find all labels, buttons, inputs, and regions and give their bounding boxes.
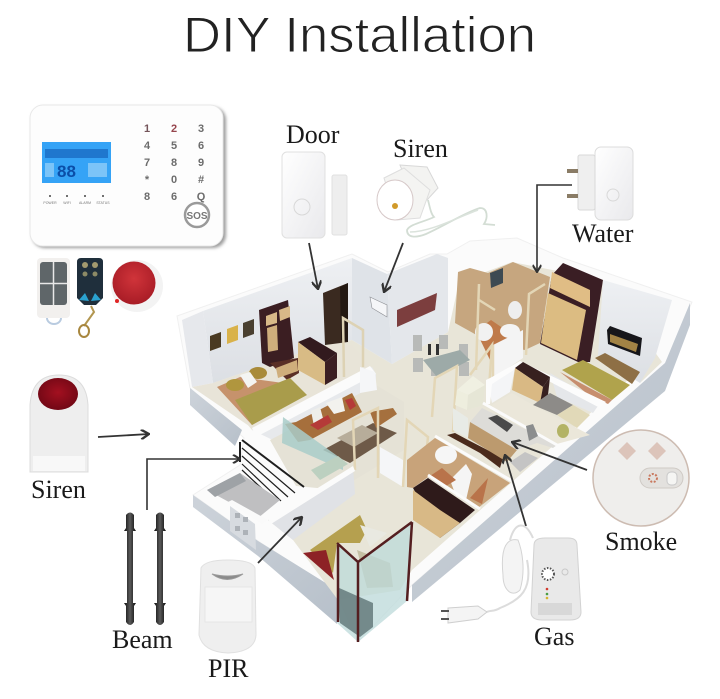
stair railing xyxy=(240,440,304,501)
icon: alarm keypad panel: 1 xyxy=(144,123,150,135)
bed left bedroom xyxy=(217,367,307,425)
device: PIR sensor xyxy=(199,560,256,653)
wardrobe left bedroom xyxy=(259,300,299,380)
icon: alarm keypad panel: 5 xyxy=(171,140,177,152)
label: Water: Water xyxy=(572,219,634,248)
label: Beam: Beam xyxy=(112,625,173,654)
arrow: water sensor xyxy=(537,185,572,272)
icon: alarm keypad panel: 3 xyxy=(198,123,204,135)
outer wall faces xyxy=(190,303,690,624)
dining set xyxy=(413,335,470,432)
label: Gas: Gas xyxy=(534,622,574,651)
wall separating bedroom and living room xyxy=(252,367,376,442)
device: beam detectors xyxy=(124,512,166,625)
icon: alarm keypad panel: # xyxy=(198,174,204,186)
device: gas detector and plug xyxy=(441,525,581,623)
cabinet lower xyxy=(413,478,475,538)
icon: alarm keypad panel: 7 xyxy=(144,157,150,169)
floor xyxy=(213,262,662,600)
device: door sensor xyxy=(282,152,347,238)
balcony xyxy=(207,473,280,550)
label: top Siren: Siren xyxy=(393,134,448,163)
arrow: smoke xyxy=(512,442,587,470)
left bedroom walls xyxy=(182,254,448,428)
icon: white remote xyxy=(37,258,70,324)
device: outdoor siren xyxy=(30,375,88,472)
icon: alarm keypad panel: 9 xyxy=(198,157,204,169)
cabinet left bedroom xyxy=(298,337,337,385)
lower bedroom wall xyxy=(268,466,355,540)
fridge xyxy=(453,376,485,438)
arrow: PIR xyxy=(258,517,302,563)
label: PIR: PIR xyxy=(208,654,249,683)
icon: alarm keypad panel: 8 xyxy=(144,191,150,203)
icon: alarm keypad panel: 2 xyxy=(171,123,177,135)
electric switch panel xyxy=(235,513,248,535)
second room: cabinet and single bed xyxy=(486,361,606,445)
door xyxy=(323,283,363,377)
icon: alarm keypad panel: 6 xyxy=(198,140,204,152)
wall pictures xyxy=(210,319,254,351)
title: DIY Installation xyxy=(183,7,536,63)
icon: alarm keypad panel: 8 xyxy=(171,157,177,169)
right bedroom wall and tv xyxy=(595,280,672,384)
icon: alarm keypad panel: WIFI xyxy=(63,201,71,205)
icon: alarm keypad panel: * xyxy=(145,174,150,186)
control panel with remotes and mini siren xyxy=(30,105,226,337)
icon: alarm keypad panel xyxy=(30,105,226,248)
icon: black key fob remote xyxy=(77,258,103,337)
icon: alarm keypad panel: 88 xyxy=(57,162,76,181)
wall tops silhouette xyxy=(177,238,692,642)
arrow: outdoor siren xyxy=(98,434,149,437)
glass corner wall xyxy=(337,522,412,642)
icon: alarm keypad panel: POWER xyxy=(43,201,57,205)
bed right bedroom xyxy=(560,360,630,404)
wall-mounted control panel xyxy=(370,297,387,317)
bathroom upper xyxy=(455,262,550,403)
label: Door: Door xyxy=(286,120,340,149)
wardrobe right bedroom xyxy=(540,263,603,362)
icon: alarm keypad panel: 6 xyxy=(171,191,177,203)
icon: alarm keypad panel: 0 xyxy=(171,174,177,186)
device: smoke detector xyxy=(593,430,689,526)
lower bed xyxy=(303,515,393,588)
arrow: door sensor xyxy=(309,243,318,289)
icon: alarm keypad panel: STATUS xyxy=(96,201,110,205)
floor plan xyxy=(177,238,692,642)
icon: alarm keypad panel: 4 xyxy=(144,140,151,152)
device: ceiling siren xyxy=(377,165,495,237)
icon: alarm keypad panel: Q xyxy=(197,191,206,203)
framed picture on wall xyxy=(397,293,437,327)
lower bathroom xyxy=(407,436,512,509)
label: left Siren: Siren xyxy=(31,475,86,504)
kitchen counter xyxy=(447,403,557,472)
arrow: ceiling siren xyxy=(384,243,403,292)
device: water sensor xyxy=(567,147,633,220)
icon: round red indoor siren xyxy=(111,260,163,312)
icon: alarm keypad panel: SOS xyxy=(186,211,208,222)
living room xyxy=(270,367,428,490)
arrow: gas xyxy=(505,455,526,526)
label: Smoke: Smoke xyxy=(605,527,677,556)
icon: alarm keypad panel: ALARM xyxy=(79,201,91,205)
arrow: beam xyxy=(147,459,240,510)
